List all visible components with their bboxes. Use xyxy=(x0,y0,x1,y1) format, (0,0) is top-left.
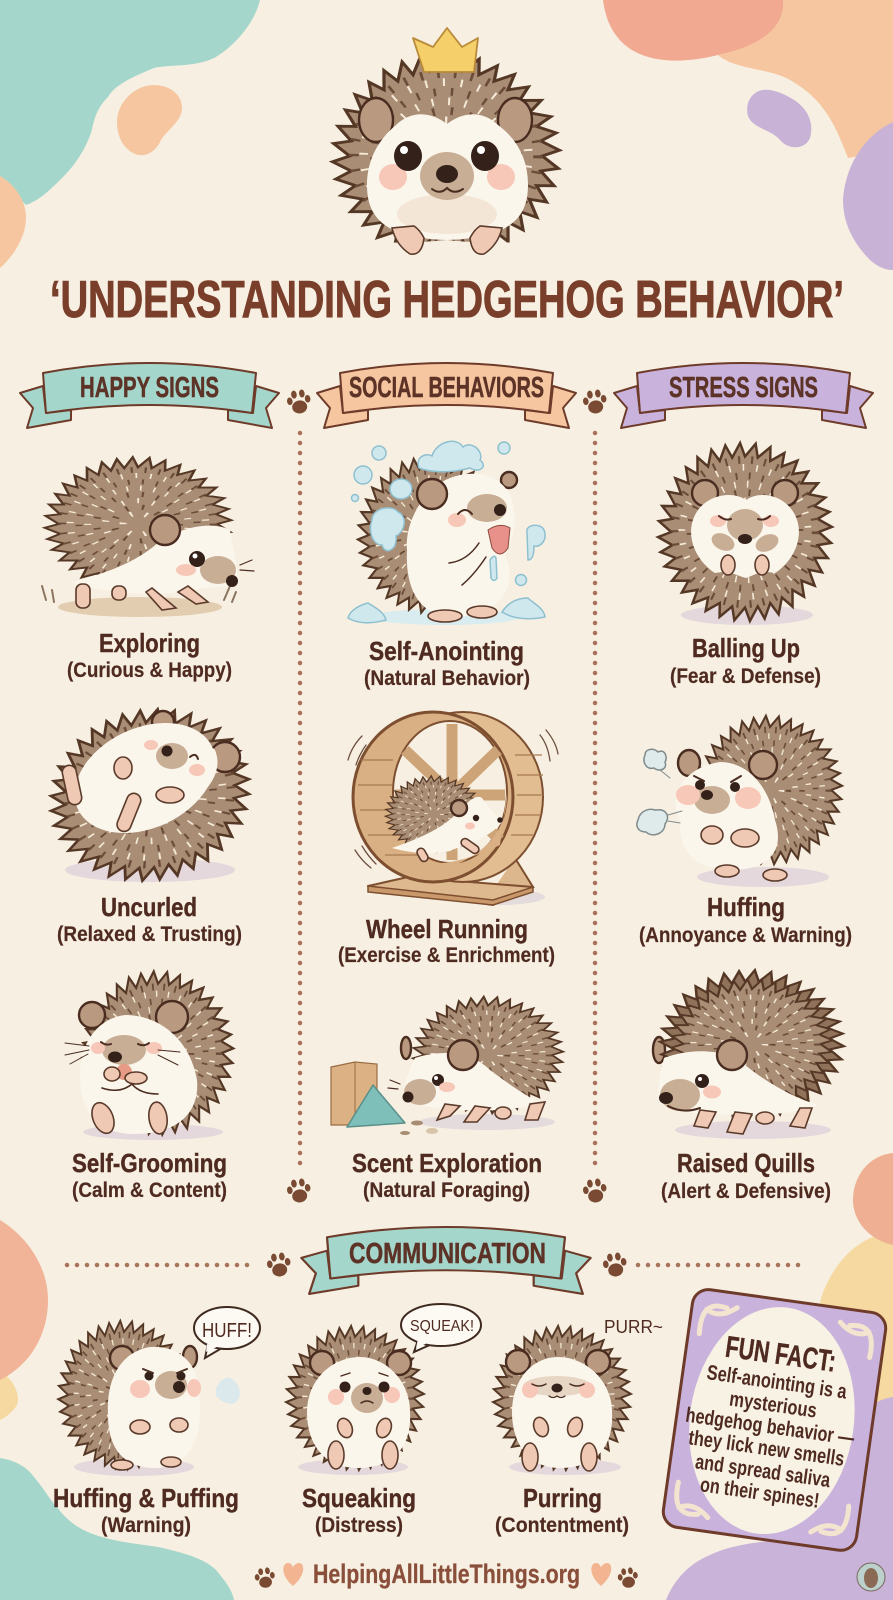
label: purring xyxy=(495,1483,629,1537)
icon: paw left of communication xyxy=(266,1251,292,1278)
label: self-anointing xyxy=(364,636,530,690)
footer website line: HelpingAllLittleThings.org xyxy=(313,1559,580,1589)
label: wheel running: (Exercise & Enrichment) xyxy=(338,944,555,967)
banner: happy signs: HAPPY SIGNS xyxy=(80,372,219,404)
label: huffing: (Annoyance & Warning) xyxy=(639,924,852,947)
label: uncurled: Uncurled xyxy=(101,892,197,922)
label: balling up xyxy=(670,633,821,688)
label: squeaking: Squeaking xyxy=(302,1483,416,1513)
label: self-grooming: (Calm & Content) xyxy=(72,1179,227,1202)
icon: paw column foot left xyxy=(286,1177,312,1204)
label: self-anointing: Self-Anointing xyxy=(369,636,524,666)
label: exploring: Exploring xyxy=(99,628,200,658)
panel: scent exploration hedgehog with toys xyxy=(331,997,563,1135)
label: raised quills: Raised Quills xyxy=(677,1148,815,1178)
icon: footer paw left xyxy=(254,1567,276,1589)
speech bubble: squeak: SQUEAK! xyxy=(410,1318,474,1335)
label: huffing: Huffing xyxy=(707,892,785,922)
panel: wheel running hedgehog xyxy=(348,712,558,905)
label: self-grooming: Self-Grooming xyxy=(72,1148,227,1178)
icon: paw right of communication xyxy=(602,1251,628,1278)
panel: huffing and puffing hedgehog xyxy=(58,1321,240,1476)
panel: self-anointing hedgehog xyxy=(348,441,545,625)
icon: paw between banners left xyxy=(286,388,312,415)
speech bubble: huff xyxy=(194,1307,260,1358)
label: balling up: Balling Up xyxy=(692,633,800,663)
label: uncurled xyxy=(57,892,242,946)
label: purring: (Contentment) xyxy=(495,1514,629,1537)
panel: fun fact card xyxy=(661,1288,888,1552)
banner: stress signs xyxy=(614,363,873,428)
panel: balling up hedgehog xyxy=(658,443,832,625)
banner: happy signs xyxy=(20,363,279,428)
fun fact body: they lick new smells xyxy=(687,1426,846,1471)
fun fact body: and spread saliva xyxy=(694,1450,832,1492)
purr sound text: PURR~ xyxy=(604,1317,663,1337)
label: exploring xyxy=(67,628,232,682)
fun fact body: mysterious xyxy=(728,1388,818,1423)
banner: stress signs: STRESS SIGNS xyxy=(669,372,818,404)
label: scent exploration: Scent Exploration xyxy=(352,1148,542,1178)
icon: heart right xyxy=(591,1563,611,1586)
label: scent exploration xyxy=(352,1148,542,1202)
label: exploring: (Curious & Happy) xyxy=(67,659,232,682)
panel: raised quills hedgehog xyxy=(653,964,851,1139)
speech bubble: squeak xyxy=(401,1304,481,1352)
label: scent exploration: (Natural Foraging) xyxy=(363,1179,530,1202)
label: self-anointing: (Natural Behavior) xyxy=(364,667,530,690)
background blobs top xyxy=(0,0,893,270)
label: huffing and puffing: Huffing & Puffing xyxy=(53,1483,239,1513)
fun fact heading: FUN FACT: xyxy=(723,1331,838,1379)
label: squeaking: (Distress) xyxy=(315,1514,403,1537)
panel: squeaking hedgehog xyxy=(286,1326,424,1475)
panel: uncurled hedgehog xyxy=(31,687,269,903)
panel: huffing hedgehog xyxy=(637,716,842,887)
label: huffing xyxy=(639,892,852,947)
label: huffing and puffing: (Warning) xyxy=(101,1514,191,1537)
fun fact body xyxy=(675,1359,862,1516)
hero hedgehog with crown xyxy=(333,28,559,258)
banner: communication xyxy=(301,1227,591,1294)
panel: purring hedgehog xyxy=(493,1326,631,1475)
label: wheel running xyxy=(338,914,555,967)
label: purring: Purring xyxy=(523,1483,602,1513)
icon: paw column foot right xyxy=(582,1177,608,1204)
label: raised quills xyxy=(661,1148,831,1203)
icon: footer paw right xyxy=(617,1567,639,1589)
speech bubble: huff: HUFF! xyxy=(202,1320,252,1342)
fun fact body: Self-anointing is a xyxy=(705,1361,848,1404)
fun fact body: on their spines! xyxy=(699,1473,821,1513)
label: balling up: (Fear & Defense) xyxy=(670,665,821,688)
label: self-grooming xyxy=(72,1148,227,1202)
icon: heart left xyxy=(283,1563,303,1586)
label: uncurled: (Relaxed & Trusting) xyxy=(57,923,242,946)
background blobs bottom xyxy=(0,1153,893,1600)
icon: paw between banners right xyxy=(582,388,608,415)
banner: social behaviors xyxy=(317,363,576,428)
label: huffing and puffing xyxy=(53,1483,239,1537)
banner: social behaviors: SOCIAL BEHAVIORS xyxy=(349,372,544,404)
label: wheel running: Wheel Running xyxy=(366,914,528,944)
panel: self-grooming hedgehog xyxy=(65,971,233,1140)
panel: exploring hedgehog xyxy=(42,457,254,617)
icon: small logo badge xyxy=(857,1563,885,1591)
banner: communication: COMMUNICATION xyxy=(349,1238,546,1270)
label: squeaking xyxy=(302,1483,416,1537)
label: raised quills: (Alert & Defensive) xyxy=(661,1180,831,1203)
